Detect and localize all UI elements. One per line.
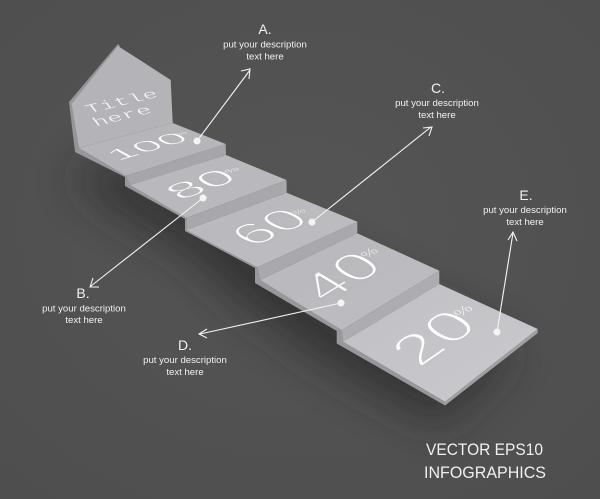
riser 100: [126, 144, 226, 185]
label D: text here: [166, 367, 204, 378]
label B: [42, 285, 126, 326]
footer text: VECTOR EPS10: [426, 440, 543, 459]
value 80%: 80: [155, 164, 246, 204]
left thickness strip: [75, 148, 445, 406]
value 40%: %: [357, 245, 383, 261]
title text: here: [89, 103, 157, 130]
label D: [143, 337, 227, 378]
arrow D: [199, 300, 344, 338]
label C: [395, 80, 479, 121]
value 80%: %: [222, 166, 242, 175]
value 20%: 20: [377, 301, 492, 375]
label D: D.: [178, 337, 192, 353]
label D: put your description: [143, 355, 227, 366]
footer text: [424, 440, 546, 482]
label E: text here: [506, 217, 544, 228]
title text: [81, 87, 162, 130]
value 100%: %: [174, 130, 190, 137]
title panel: [72, 46, 173, 148]
arrow B: [90, 195, 206, 287]
step 80: [130, 155, 286, 218]
label E: put your description: [483, 205, 567, 216]
label A: [223, 21, 307, 62]
step 20: [343, 284, 538, 402]
stair shadow: [70, 160, 515, 425]
label B: put your description: [42, 304, 126, 314]
label A: A.: [258, 21, 272, 37]
riser 80: [186, 180, 287, 230]
value 20%: %: [449, 302, 477, 320]
value 60%: %: [288, 207, 310, 217]
label B: text here: [65, 315, 103, 326]
staircase: [69, 44, 538, 406]
value 100%: 100: [98, 129, 196, 164]
footer text: INFOGRAPHICS: [424, 463, 546, 482]
label C: text here: [418, 110, 456, 121]
label E: E.: [519, 187, 533, 203]
value 40%: 40: [287, 243, 396, 310]
riser 60: [257, 222, 357, 280]
label E: [483, 187, 567, 228]
arrow A: [194, 69, 250, 144]
title text: Title: [81, 87, 162, 117]
step 20 front edge: [445, 329, 538, 406]
value 60%: 60: [217, 202, 322, 252]
step 40: [260, 233, 439, 330]
arrow C: [309, 127, 432, 225]
step 100: [79, 123, 226, 176]
label A: text here: [246, 52, 284, 62]
step 60: [186, 193, 357, 267]
label C: put your description: [395, 98, 479, 109]
label A: put your description: [223, 40, 307, 50]
label C: C.: [431, 80, 445, 96]
riser 40: [342, 271, 439, 342]
label B: B.: [76, 285, 90, 301]
arrow E: [494, 232, 517, 335]
title panel side edge: [69, 44, 120, 152]
